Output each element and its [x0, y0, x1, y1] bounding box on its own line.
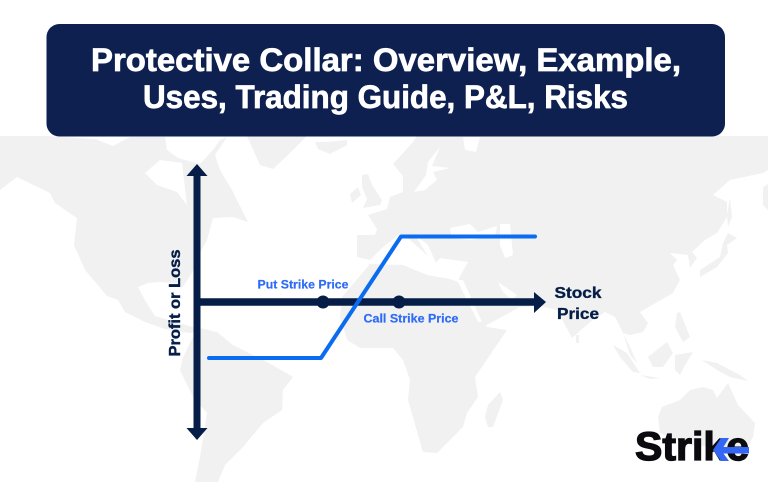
vertical axis arrow [186, 164, 208, 440]
call strike point [392, 296, 406, 308]
title text: Protective Collar: Overview, Example, [91, 42, 681, 78]
payoff line [209, 236, 535, 358]
x axis label: Stock [554, 285, 602, 302]
title banner [46, 24, 725, 136]
logo arrow icon [713, 438, 749, 461]
chart: protective collar payoff [167, 164, 602, 440]
map inland seas and bays [145, 137, 517, 322]
title text [91, 42, 681, 115]
logo: Strike: Strike [635, 425, 749, 469]
background world map [0, 136, 768, 482]
x axis label [554, 285, 602, 323]
title text: Uses, Trading Guide, P&L, Risks [143, 79, 628, 115]
call strike label: Call Strike Price [364, 312, 459, 326]
y axis label: Profit or Loss [167, 249, 184, 356]
x axis label: Price [557, 306, 599, 323]
horizontal axis arrow [197, 292, 546, 313]
put strike label: Put Strike Price [258, 278, 349, 292]
put strike point [316, 296, 330, 308]
